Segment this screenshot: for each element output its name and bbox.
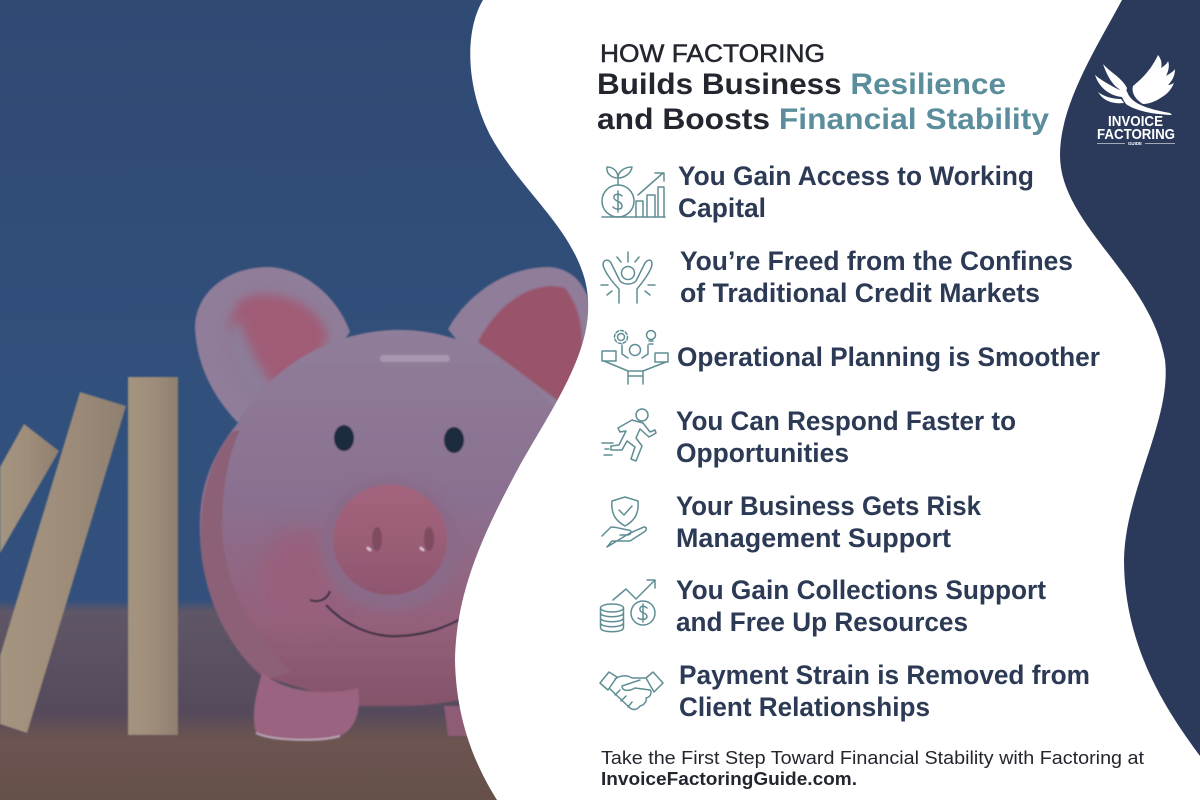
benefit 2: freed from credit markets: of Traditional Credit Markets	[680, 278, 1040, 308]
dominoes	[0, 377, 178, 735]
benefit 5: risk management: Management Support	[676, 523, 951, 553]
title: and Boosts Financial Stability	[597, 103, 1049, 136]
title: HOW FACTORING	[600, 40, 825, 68]
text: respond faster to opportunities: You Can Respond Faster to	[676, 406, 1016, 436]
white content panel	[455, 0, 1200, 800]
logo: Invoice Factoring Guide	[1095, 55, 1175, 146]
logo wordmark: GUIDE	[1128, 141, 1142, 146]
icon: shield in open hand	[602, 497, 646, 547]
logo wordmark: INVOICE	[1108, 113, 1163, 130]
text: collections support: You Gain Collections Support	[676, 575, 1046, 605]
footer call to action	[601, 747, 1144, 789]
navy right wave	[1060, 0, 1200, 756]
piggy bank	[195, 267, 600, 740]
benefit 5: risk management	[602, 491, 982, 553]
icon: eagle wings	[1095, 55, 1175, 115]
icon: coins, dollar and rising arrow	[600, 580, 655, 632]
title	[597, 40, 1049, 136]
benefit 4: respond faster	[602, 406, 1016, 468]
icon: running person	[602, 409, 656, 461]
text: risk management support: Your Business Gets Risk	[676, 491, 982, 521]
icon: person juggling gear and bulb	[602, 330, 668, 384]
icon: handshake	[600, 672, 663, 709]
logo wordmark	[1097, 113, 1175, 146]
footer call to action: InvoiceFactoringGuide.com.	[601, 768, 857, 789]
benefit 6: collections support: and Free Up Resources	[676, 607, 968, 637]
text: you gain access to working capital: You Gain Access to Working	[678, 161, 1034, 191]
title: Builds Business Resilience	[597, 68, 1006, 101]
text: operational planning is smoother: Operational Planning is Smoother	[677, 342, 1100, 372]
benefit 6: collections support	[600, 575, 1046, 637]
benefit 7: payment strain removed	[600, 660, 1090, 722]
footer call to action: Take the First Step Toward Financial Stability with Factoring at	[601, 747, 1144, 768]
icon: plant coin and growth bars	[602, 167, 665, 217]
text: freed from traditional credit markets: You’re Freed from the Confines	[680, 246, 1073, 276]
benefit 1: working capital: Capital	[678, 193, 766, 223]
text: payment strain removed: Payment Strain is Removed from	[679, 660, 1090, 690]
benefit 7: payment strain removed: Client Relationships	[679, 692, 930, 722]
icon: person with raised arms	[601, 252, 655, 303]
benefit 4: respond faster: Opportunities	[676, 438, 849, 468]
logo wordmark: FACTORING	[1097, 126, 1175, 143]
benefit 1: working capital	[602, 161, 1034, 223]
benefit 2: freed from credit markets	[601, 246, 1073, 308]
benefit 3: operational planning	[602, 330, 1100, 384]
